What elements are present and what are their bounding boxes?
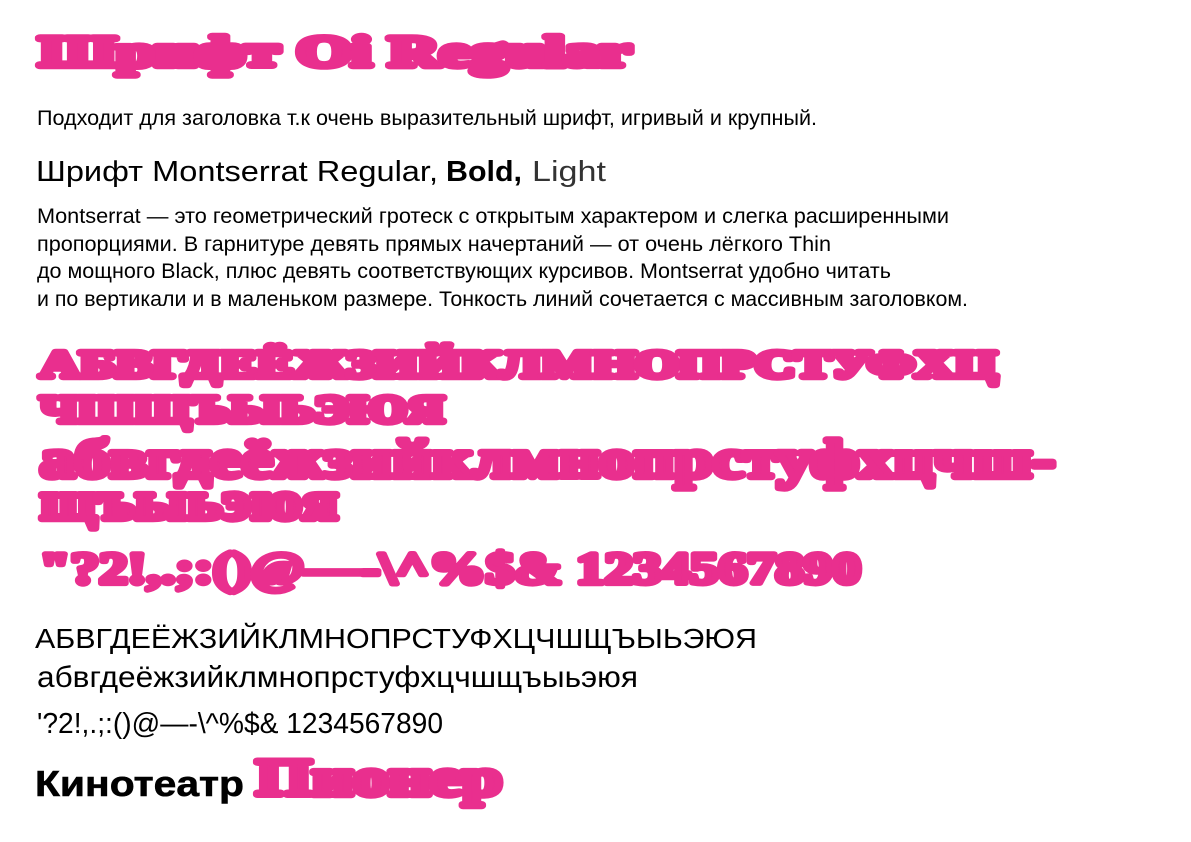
text block: Montserrat description: пропорциями. В гарнитуре девять прямых начертаний — от очень лёгкого Thin xyxy=(37,232,831,256)
text block: Montserrat description: Montserrat — это геометрический гротеск с открытым характером и слегка расширенными xyxy=(37,204,949,228)
Oi uppercase alphabet: ЧШЩЪЫЬЭЮЯ xyxy=(40,389,444,431)
heading: Montserrat styles: Light xyxy=(532,156,606,188)
Oi uppercase alphabet xyxy=(40,344,997,431)
text block: Montserrat description: и по вертикали и в маленьком размере. Тонкость линий сочетается с массивным заголовком. xyxy=(37,287,968,311)
Oi symbols and digits: "?2!,.;:()@—-\^%$& 1234567890 xyxy=(39,544,861,593)
Oi lowercase alphabet xyxy=(40,429,1055,531)
sample: cinema name xyxy=(35,750,502,807)
sample: cinema name: Кинотеатр xyxy=(35,763,244,804)
Oi uppercase alphabet: АБВГДЕЁЖЗИЙКЛМНОПРСТУФХЦ xyxy=(40,344,997,386)
Montserrat lowercase alphabet: абвгдеёжзийклмнопрстуфхцчшщъыьэюя xyxy=(37,661,638,694)
heading: Montserrat styles: Шрифт Montserrat Regular, xyxy=(36,156,438,188)
sample: cinema name: Пионер xyxy=(256,750,502,807)
Montserrat symbols and digits: '?2!,.;:()@—-\^%$& 1234567890 xyxy=(37,708,443,740)
text block: Montserrat description xyxy=(37,204,968,311)
Oi lowercase alphabet: щъыьэюя xyxy=(40,471,338,531)
Montserrat uppercase alphabet: АБВГДЕЁЖЗИЙКЛМНОПРСТУФХЦЧШЩЪЫЬЭЮЯ xyxy=(35,623,757,654)
Oi lowercase alphabet: абвгдеёжзийклмнопрстуфхцчш- xyxy=(40,429,1055,489)
heading: Montserrat styles: Bold, xyxy=(446,156,522,188)
heading: Montserrat styles xyxy=(36,156,606,188)
text block: Montserrat description: до мощного Black, плюс девять соответствующих курсивов. Montserrat удобно читать xyxy=(37,259,891,283)
title: Шрифт Oi Regular xyxy=(39,29,631,76)
text block: Oi description: Подходит для заголовка т.к очень выразительный шрифт, игривый и крупный. xyxy=(37,106,817,130)
